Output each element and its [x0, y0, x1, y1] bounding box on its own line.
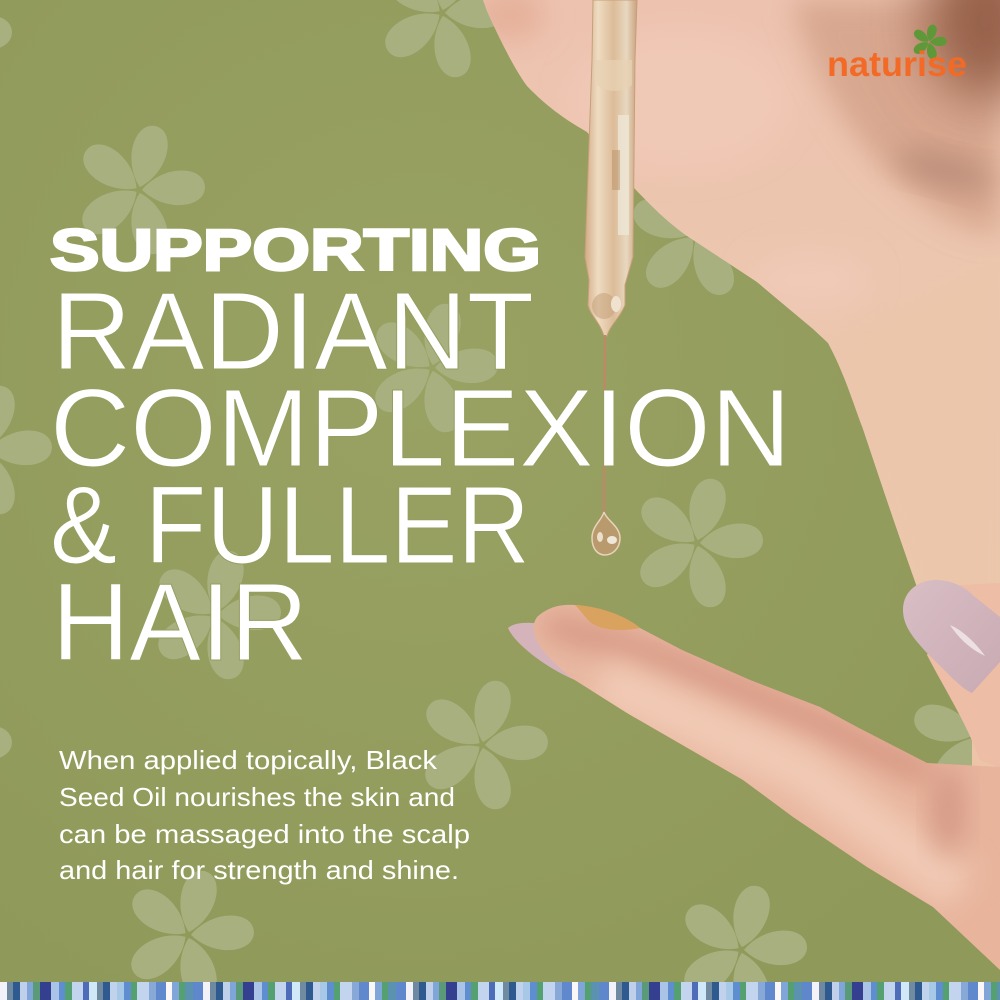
body text: can be massaged into the scalp	[59, 819, 470, 849]
headline: COMPLEXION	[50, 367, 791, 490]
body text: and hair for strength and shine.	[59, 855, 459, 885]
index finger	[500, 590, 1000, 980]
dropper	[585, 0, 637, 336]
logo: naturise: naturise	[827, 45, 967, 84]
thumb	[903, 580, 1000, 770]
striped bottom border	[0, 982, 1000, 1000]
body text	[59, 745, 470, 885]
icon: logo flower	[912, 24, 947, 60]
headline: & FULLER	[50, 464, 530, 587]
headline: HAIR	[52, 561, 308, 684]
upper hand	[470, 0, 1000, 610]
finger nail	[508, 623, 575, 680]
thumb nail	[903, 580, 1000, 693]
headline: RADIANT	[52, 270, 534, 393]
logo: naturise	[827, 24, 967, 84]
body text: Seed Oil nourishes the skin and	[59, 782, 455, 812]
body text: When applied topically, Black	[59, 745, 438, 775]
headline	[50, 218, 791, 684]
headline: SUPPORTING	[50, 218, 541, 283]
oil thread and drop	[592, 335, 620, 555]
oil on fingertip	[575, 605, 640, 630]
